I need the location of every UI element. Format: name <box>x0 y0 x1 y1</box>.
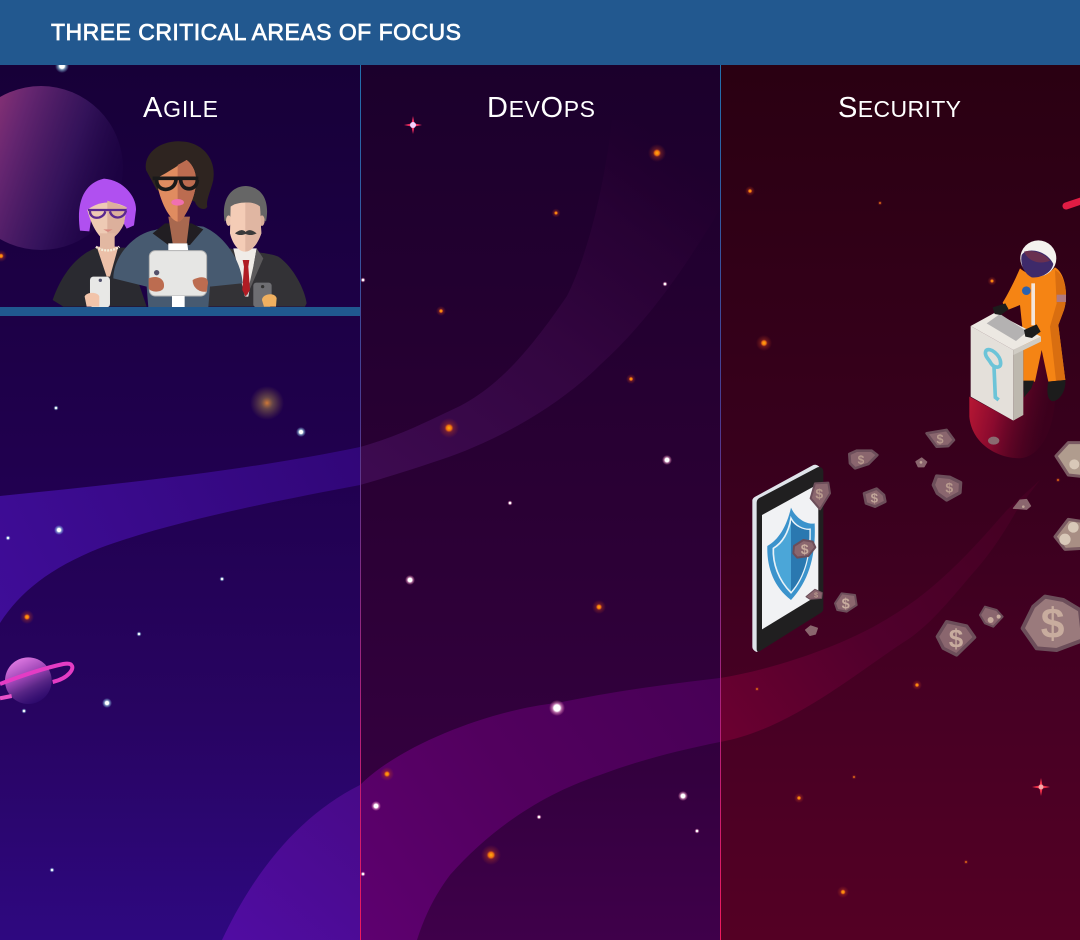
column dividers <box>360 65 721 940</box>
person: man with moustache <box>200 186 307 307</box>
asteroid: $ <box>858 453 865 467</box>
asteroid: $ <box>945 480 953 496</box>
person: purple-haired woman <box>53 179 147 307</box>
gloves <box>993 303 1041 338</box>
icon: ringed planet <box>0 657 72 704</box>
asteroid <box>1023 597 1080 650</box>
background wave band <box>720 480 1040 742</box>
asteroid <box>806 626 817 635</box>
asteroid <box>1055 519 1080 549</box>
heading: Agile: AGILE <box>143 92 218 124</box>
icon: sparkle star <box>404 116 422 134</box>
asteroid: $ <box>842 596 850 612</box>
asteroid <box>927 430 954 447</box>
key server box <box>971 313 1041 421</box>
asteroid: $ <box>936 432 944 446</box>
icon: key <box>985 350 1001 400</box>
illustration: astronaut at key server <box>969 240 1066 458</box>
asteroid <box>1013 499 1031 509</box>
icon: shield <box>767 508 815 600</box>
asteroid: $ <box>949 623 964 653</box>
asteroid: $ <box>1041 600 1065 648</box>
asteroid <box>849 451 877 468</box>
title: THREE CRITICAL AREAS OF FOCUS <box>51 19 461 45</box>
header banner <box>0 0 1080 65</box>
asteroid <box>793 540 815 558</box>
background wave bands <box>361 228 720 940</box>
asteroid: $ <box>815 486 823 502</box>
stars <box>745 186 1060 898</box>
asteroid <box>811 483 830 509</box>
asteroid <box>1056 443 1080 477</box>
red streak <box>1066 200 1080 206</box>
icon: sparkle star <box>1032 778 1050 796</box>
stars <box>360 144 700 876</box>
heading: Security: SECURITY <box>838 92 961 124</box>
asteroid: $ <box>801 541 809 557</box>
red glow beam <box>969 352 1048 458</box>
asteroid <box>864 489 885 507</box>
background wave bands <box>0 447 360 940</box>
dollar asteroids <box>793 430 1080 655</box>
asteroid <box>835 593 857 612</box>
astronaut helmet <box>1020 240 1056 277</box>
asteroid <box>937 622 975 655</box>
illustration: three business people <box>53 141 307 307</box>
panel: Security column <box>720 65 1080 940</box>
person: central woman with tablet <box>113 141 243 307</box>
stars <box>0 59 306 872</box>
astronaut suit <box>1003 267 1066 401</box>
asteroid <box>980 607 1003 627</box>
asteroid <box>806 589 822 600</box>
asteroid: $ <box>871 491 879 506</box>
asteroid <box>933 476 961 500</box>
asteroid: $ <box>814 591 818 600</box>
heading: DevOps: DEVOPS <box>487 92 595 124</box>
illustration: phone with shield <box>752 465 823 652</box>
blue desk bar <box>0 307 360 316</box>
planet <box>0 86 123 250</box>
panel: DevOps column <box>360 65 720 940</box>
asteroid <box>916 458 927 467</box>
panel: Agile column <box>0 59 360 940</box>
